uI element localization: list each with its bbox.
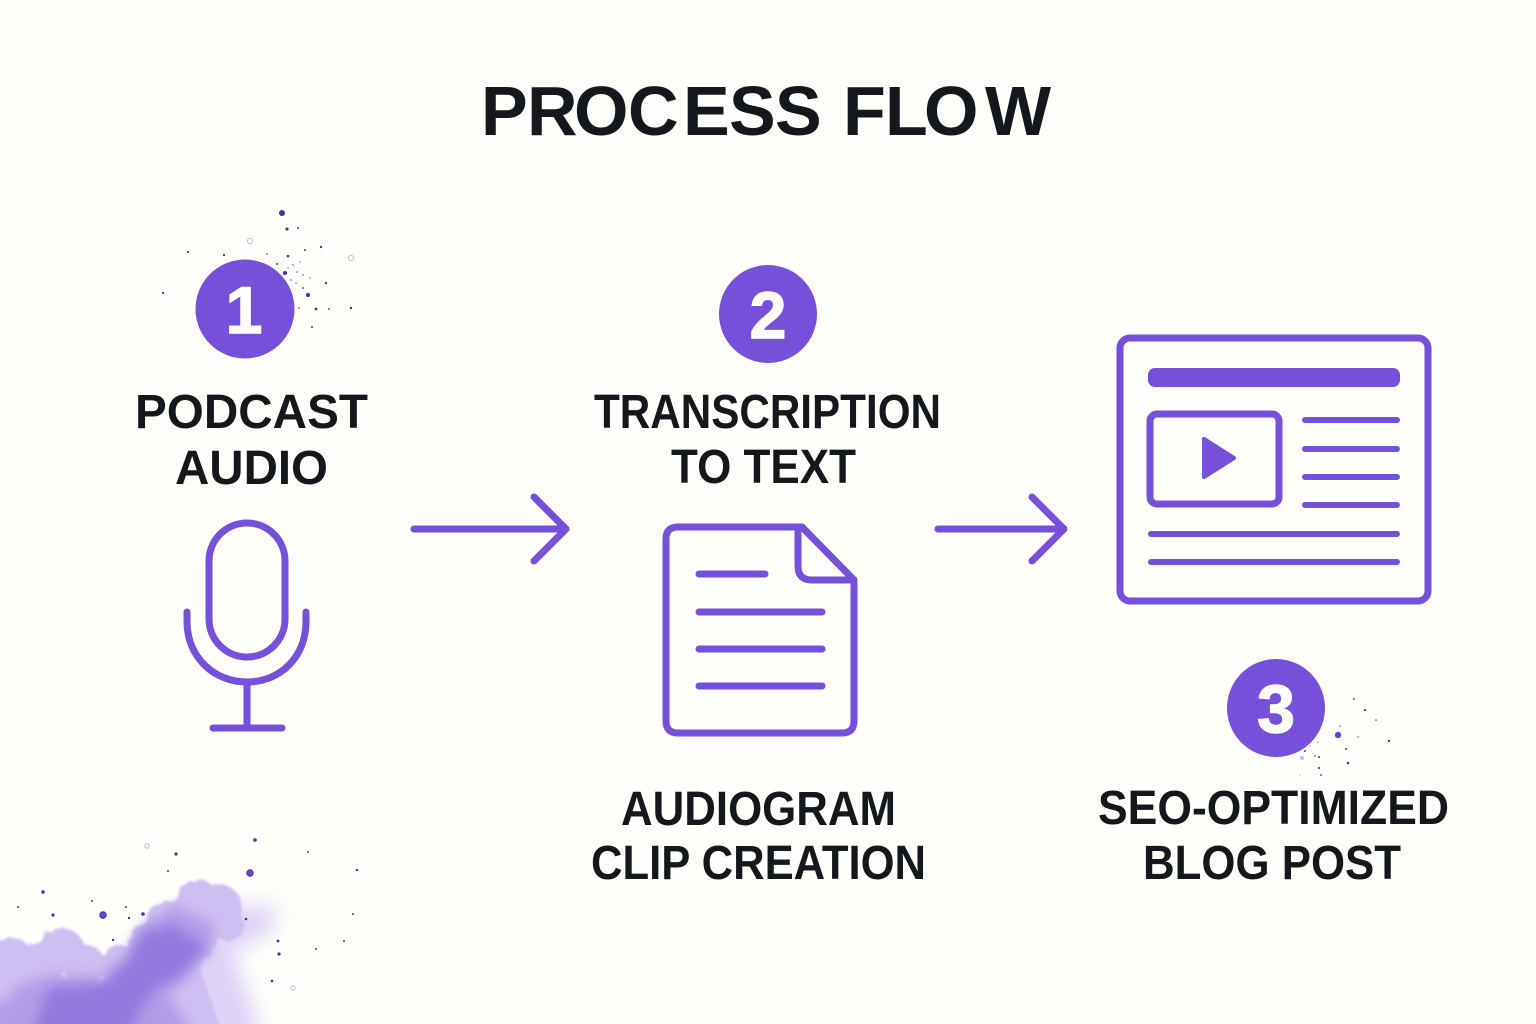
speckles around badge 3 [1299,698,1390,776]
badge 1 [196,260,294,358]
step 1 column [135,260,368,728]
label: seo-optimized blog post: BLOG POST [1143,837,1401,890]
label: audiogram clip creation: AUDIOGRAM [621,783,896,836]
label: audiogram clip creation: CLIP CREATION [591,837,926,890]
label: transcription to text [594,386,941,494]
step 3 column [1098,338,1449,890]
badge 3: 3 [1257,671,1295,747]
label: transcription to text: TRANSCRIPTION [594,386,941,439]
watercolor splash [0,838,358,1024]
icon: blog page [1120,338,1428,601]
label: podcast audio: PODCAST [135,386,368,439]
arrow: step 1 to step 2 [414,497,566,561]
badge 1: 1 [226,273,262,347]
badge 2: 2 [750,278,786,352]
label: seo-optimized blog post: SEO-OPTIMIZED [1098,782,1449,835]
label: audiogram clip creation [591,783,926,890]
label: podcast audio: AUDIO [175,442,328,495]
arrow: step 2 to step 3 [938,497,1064,561]
step 2 column [591,265,941,890]
label: seo-optimized blog post [1098,782,1449,890]
icon: microphone [187,523,306,728]
label: podcast audio [135,386,368,495]
label: transcription to text: TO TEXT [671,441,856,494]
speckles around badge 1 [162,210,354,328]
title: PROCESS FLOW [481,72,1051,150]
icon: document [666,527,854,733]
badge 3 [1227,659,1325,757]
badge 2 [719,265,817,363]
